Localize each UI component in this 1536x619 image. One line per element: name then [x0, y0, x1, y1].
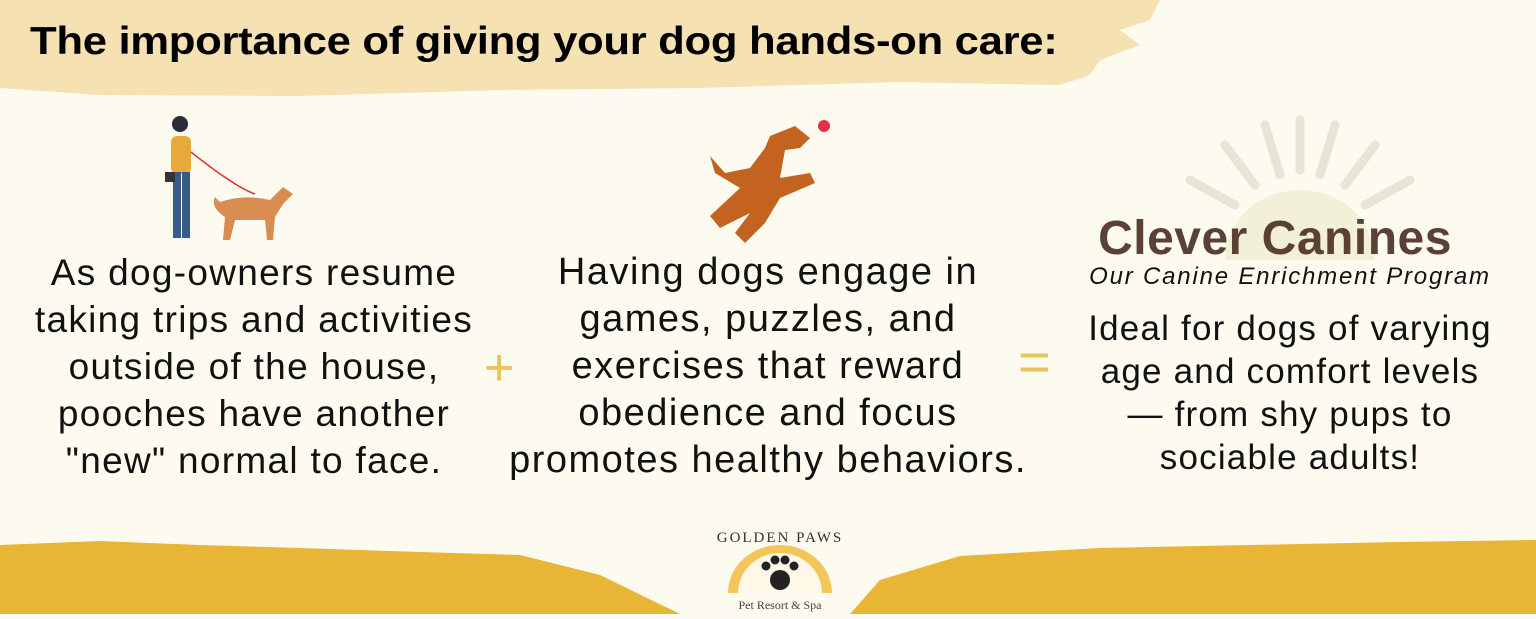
- text block: column 1: As dog-owners resume: [51, 252, 457, 293]
- text block: column 3: age and comfort levels: [1101, 352, 1479, 391]
- icon: plus: +: [484, 339, 514, 397]
- text block: column 2: promotes healthy behaviors.: [509, 439, 1027, 481]
- text block: column 3: [1088, 309, 1492, 477]
- text block: column 2: exercises that reward: [572, 345, 964, 387]
- text block: column 2: Having dogs engage in: [558, 251, 978, 293]
- heading: Clever Canines: Clever Canines: [1098, 212, 1452, 265]
- text block: column 2: [509, 251, 1027, 481]
- subtitle: Our Canine Enrichment Program: [1089, 263, 1491, 290]
- icon: woman walking dog: [165, 116, 293, 240]
- text block: column 3: — from shy pups to: [1127, 395, 1453, 434]
- text block: column 3: sociable adults!: [1160, 438, 1420, 477]
- logo: Golden Paws: GOLDEN PAWS: [717, 530, 843, 546]
- text block: column 2: obedience and focus: [578, 392, 958, 434]
- title: The importance of giving your dog hands-on care:: [30, 20, 1057, 63]
- text block: column 1: pooches have another: [58, 393, 450, 434]
- text block: column 3: Ideal for dogs of varying: [1088, 309, 1492, 348]
- icon: jumping dog with ball: [710, 120, 830, 243]
- text block: column 1: [35, 252, 473, 481]
- icon: sun rays behind program: [1186, 116, 1414, 260]
- text block: column 1: taking trips and activities: [35, 299, 473, 340]
- text block: column 1: outside of the house,: [69, 346, 439, 387]
- text block: column 1: "new" normal to face.: [66, 440, 442, 481]
- logo: Golden Paws: [717, 530, 843, 612]
- logo: Golden Paws: Pet Resort & Spa: [738, 598, 822, 612]
- text block: column 2: games, puzzles, and: [579, 298, 957, 340]
- icon: equals: =: [1018, 330, 1051, 393]
